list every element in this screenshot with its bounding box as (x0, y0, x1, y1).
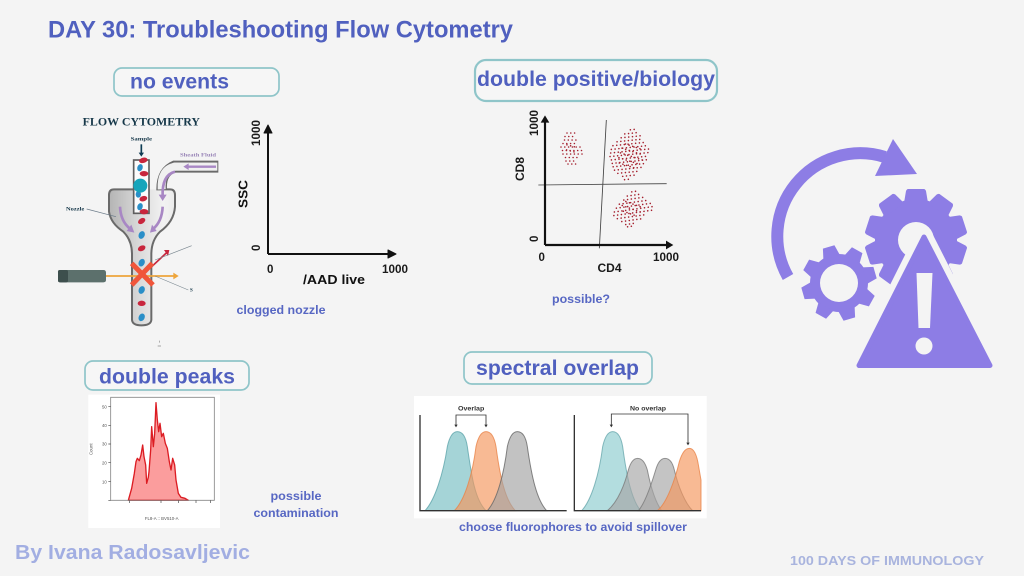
red cross (132, 263, 153, 285)
quadrant lines and axes (538, 115, 673, 249)
note: possible contamination: possible (270, 491, 322, 503)
heading: double peaks: double peaks (99, 366, 235, 388)
heading: spectral overlap: spectral overlap (476, 357, 639, 380)
laser (58, 270, 106, 282)
histogram: 30 (102, 442, 107, 447)
histogram: 40 (102, 423, 107, 428)
histogram: 20 (102, 460, 107, 465)
scatter plot: CD4 vs CD8: 1000 (529, 110, 541, 136)
data points (561, 128, 654, 228)
heading: no events (114, 68, 279, 96)
chart: SSC vs AAD live: /AAD live (303, 272, 365, 287)
panel: no events (58, 68, 408, 346)
scatter plot: CD4 vs CD8: CD8 (515, 156, 527, 181)
icon: warning triangle (859, 236, 990, 366)
histogram: 10 (102, 479, 107, 484)
scatter plot: CD4 vs CD8: 0 (529, 236, 541, 242)
chart: SSC vs AAD live: 0 (267, 264, 273, 276)
icon: gears, warning triangle and arrow (777, 139, 990, 366)
heading: double peaks (85, 361, 249, 390)
note: clogged nozzle: clogged nozzle (236, 305, 326, 317)
nozzle label: Nozzle (66, 208, 85, 213)
panel: spectral overlap (414, 352, 707, 534)
scatter plot: CD4 vs CD8 (515, 110, 679, 275)
icon: large gear (864, 189, 968, 291)
panel: double positive (475, 60, 717, 306)
histogram: FL8-A :: BV510-A (145, 516, 179, 521)
note: choose fluorophores: choose fluorophores to avoid spillover (459, 522, 688, 534)
chart: SSC vs AAD live (236, 120, 408, 287)
sheath arrows (186, 163, 216, 170)
note: possible contamination: contamination (254, 508, 338, 520)
heading: spectral overlap (464, 352, 652, 384)
flow cytometry diagram: S (190, 288, 193, 293)
series label: 100 DAYS OF IMMUNOLOGY (790, 553, 984, 568)
flow cytometry diagram (58, 115, 217, 346)
histogram: Count (88, 443, 93, 455)
flow cytometry diagram: Sample (131, 137, 153, 143)
heading: double positive/biology (475, 60, 717, 101)
flow cytometry diagram: Sheath Fluid (180, 153, 217, 159)
panel: double peaks (85, 361, 338, 528)
funnel body (109, 162, 217, 325)
scatter plot: CD4 vs CD8: 1000 (653, 252, 679, 264)
note: possible contamination (254, 491, 338, 520)
chart: SSC vs AAD live: 0 (251, 245, 263, 251)
scatter plot: CD4 vs CD8: 0 (538, 252, 545, 264)
icon: small gear (801, 245, 877, 321)
cells (137, 157, 148, 306)
histogram: 50 (102, 404, 107, 409)
author credit: By Ivana Radosavljevic (15, 541, 250, 564)
heading: double positive/biology: double positive/biology (477, 68, 715, 91)
chart: SSC vs AAD live: SSC (236, 179, 250, 208)
chart: overlap vs no overlap spectra: No overlap (630, 406, 666, 413)
title: DAY 30: Troubleshooting Flow Cytometry (48, 16, 514, 44)
heading: no events: no events (130, 70, 229, 94)
chart: overlap vs no overlap spectra: Overlap (458, 406, 484, 413)
chart: overlap vs no overlap spectra (414, 396, 707, 518)
icon: circular arrow (777, 139, 917, 277)
chart: SSC vs AAD live: 1000 (251, 120, 263, 146)
histogram (88, 395, 220, 528)
note: possible?: possible? (552, 294, 610, 306)
chart: SSC vs AAD live: 1000 (382, 264, 408, 276)
scatter plot: CD4 vs CD8: CD4 (598, 263, 622, 275)
flow cytometry diagram: FLOW CYTOMETRY (83, 115, 200, 129)
